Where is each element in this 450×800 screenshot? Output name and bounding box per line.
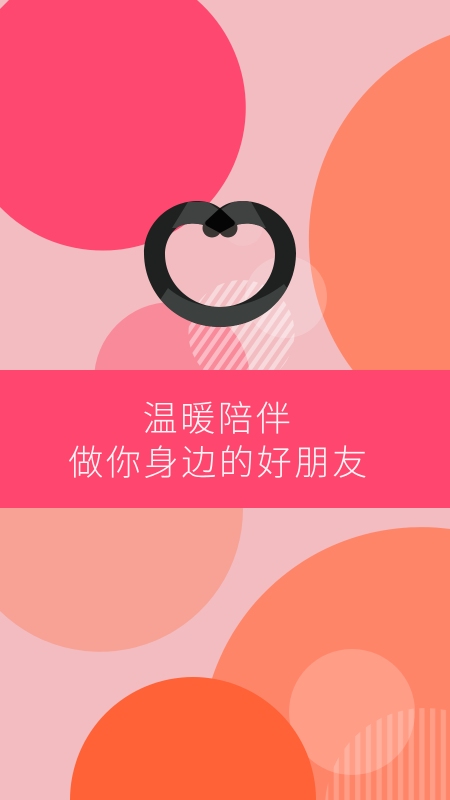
- circle: top left red: [0, 0, 246, 251]
- heart lobes: [202, 218, 238, 238]
- ring body: [144, 201, 296, 327]
- circle: pink behind banner: [94, 302, 250, 458]
- headline line 2: 做你身边的好朋友: [68, 444, 370, 483]
- headline line 1: 温暖陪伴: [143, 400, 293, 439]
- circle: bottom right large orange: [201, 527, 450, 800]
- ring lighter segments: [160, 201, 287, 327]
- circle: faint highlight inside ring: [223, 206, 263, 246]
- circle: vertical striped: [325, 708, 450, 800]
- circle: translucent light: [289, 649, 415, 775]
- centre diamond: [205, 208, 235, 233]
- headline: [68, 400, 370, 483]
- circle: bottom deep orange: [70, 677, 316, 800]
- circle: bottom left salmon: [0, 508, 243, 652]
- circle: translucent upper right of ring: [245, 256, 327, 338]
- banner: [0, 370, 450, 508]
- icon: dark heart ring: [144, 200, 296, 332]
- circle: right orange: [309, 35, 450, 443]
- circle: diagonal striped: [188, 280, 294, 370]
